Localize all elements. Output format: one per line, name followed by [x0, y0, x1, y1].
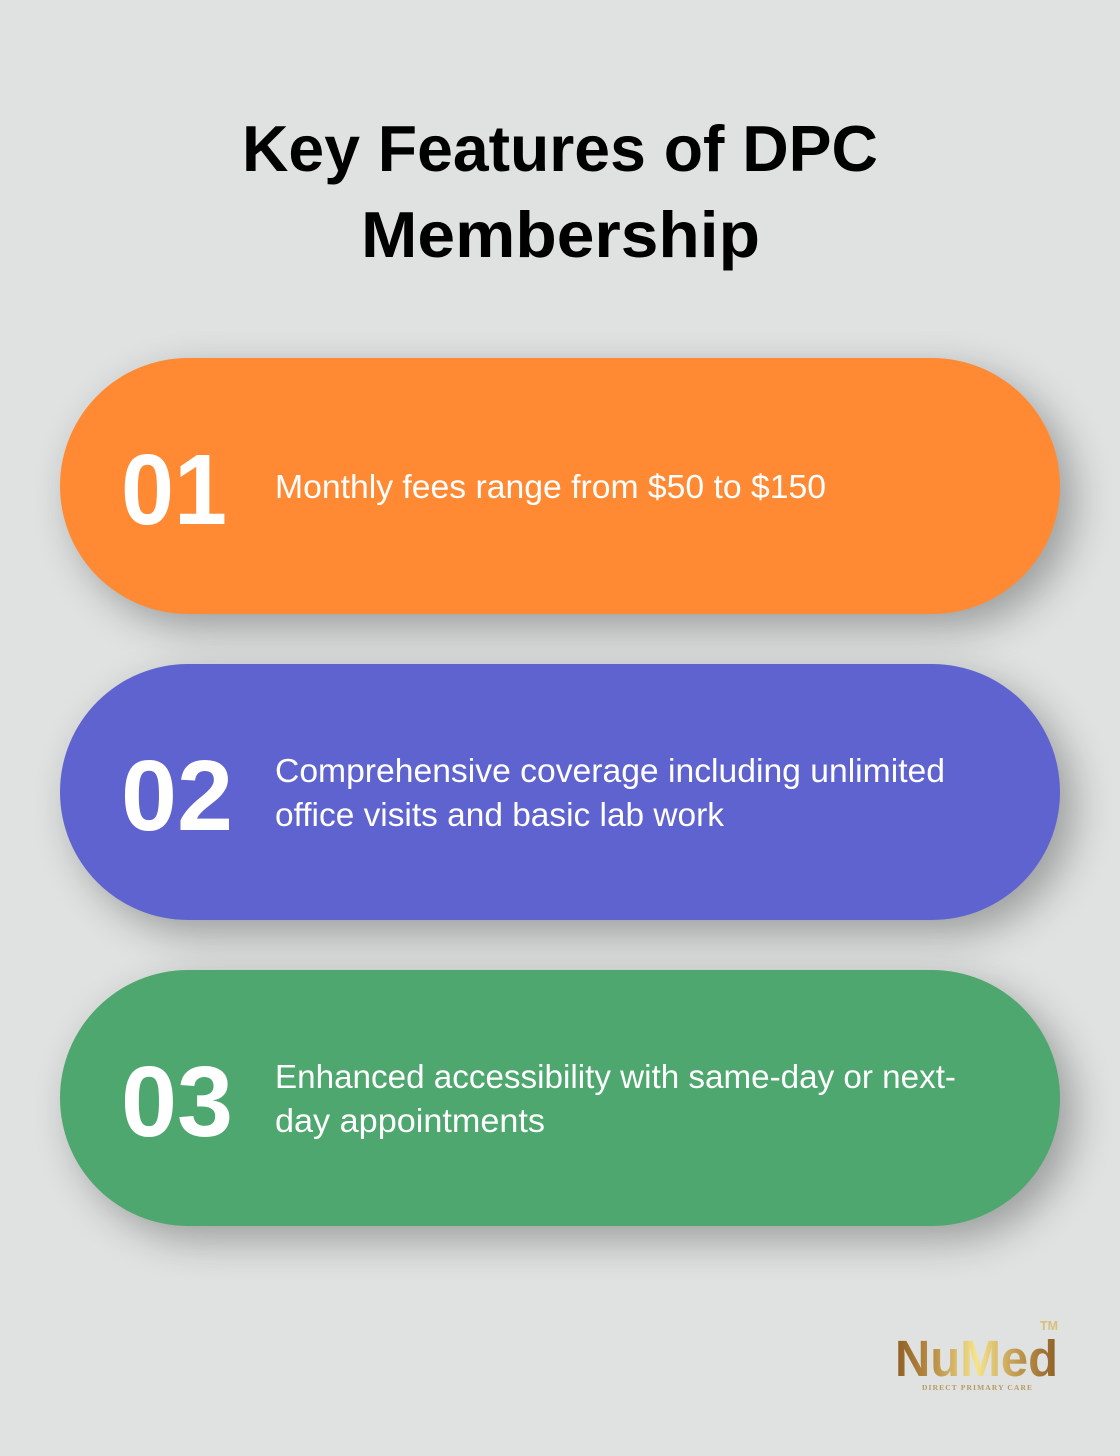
text: comprehensive coverage: Comprehensive coverage including unlimited — [275, 752, 945, 789]
title — [242, 112, 878, 271]
text: comprehensive coverage — [275, 752, 945, 833]
panel: card 01 background — [60, 358, 1060, 614]
title: Key Features of DPC — [242, 112, 878, 185]
card 01 content — [121, 434, 826, 546]
panel: card 03 background — [60, 970, 1060, 1226]
logo: NuMed: TM — [1040, 1319, 1058, 1333]
text: enhanced accessibility: day appointments — [275, 1102, 545, 1139]
text: monthly fees: Monthly fees range from $50 to $150 — [275, 468, 826, 505]
number 01: 01 — [121, 434, 227, 546]
logo: NuMed: DIRECT PRIMARY CARE — [922, 1383, 1032, 1392]
text: enhanced accessibility — [275, 1058, 956, 1139]
title: Membership — [361, 198, 760, 271]
text: enhanced accessibility: Enhanced accessibility with same-day or next- — [275, 1058, 956, 1095]
card 03 content — [121, 1046, 956, 1158]
logo: NuMed: NuMed — [895, 1330, 1058, 1387]
text: comprehensive coverage: office visits and basic lab work — [275, 796, 725, 833]
card 02 content — [121, 740, 945, 852]
panel: card 02 background — [60, 664, 1060, 920]
number 03: 03 — [121, 1046, 233, 1158]
number 02: 02 — [121, 740, 233, 852]
